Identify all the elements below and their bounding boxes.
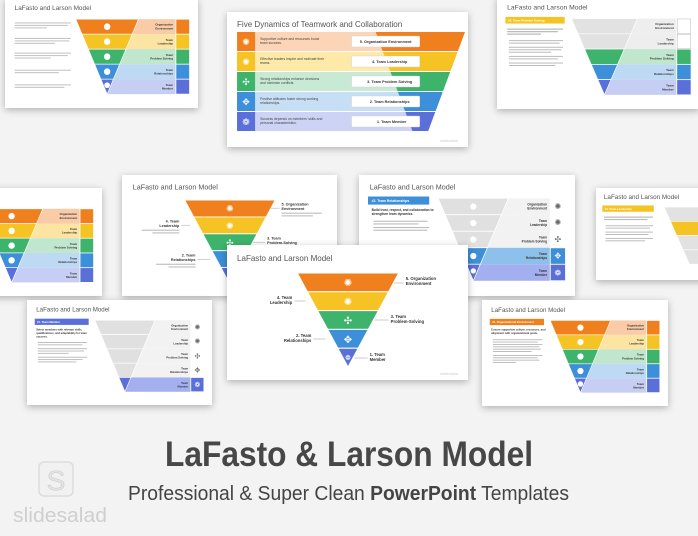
slide: bottom-right organizational environment: Team xyxy=(637,367,644,371)
slide: bottom-right organizational environment: alignment with organizational goals. xyxy=(491,331,538,335)
slide: middle-left center funnel: 3. Team xyxy=(267,237,281,241)
slide: top-center five dynamics: Strong relationships enhance decisions xyxy=(260,77,320,81)
slide: top-center five dynamics: 5. Organization Environment xyxy=(360,40,412,44)
slide: bottom-left team member: Team xyxy=(181,367,189,371)
slide: top-right side funnel: Member xyxy=(662,87,675,91)
slide: far-left partial: Organization xyxy=(60,212,77,216)
slide: middle-right team relationships xyxy=(359,175,575,296)
slide: far-left partial: Member xyxy=(66,275,78,279)
slide: top-center five dynamics xyxy=(227,12,468,147)
slide: top-center five dynamics: 2. Team Relationships xyxy=(370,100,410,104)
slide: middle-right team relationships: #2. Team Relationships xyxy=(372,199,409,203)
slide: bottom-left team member: Relationships xyxy=(170,370,189,374)
slide: bottom-left team member: ❁ xyxy=(194,381,200,389)
slide: far-left partial xyxy=(0,188,102,296)
slide: bottom-left team member: Team xyxy=(181,338,189,342)
slide: top-right side funnel: Relationships xyxy=(654,72,674,76)
slide: top-left side funnel: Environment xyxy=(155,26,173,30)
slide: top-center five dynamics: ✺ xyxy=(242,37,250,47)
slide: bottom-left team member: Select members with relevant skills, xyxy=(36,327,83,331)
slide: front center funnel: ✺ xyxy=(344,297,352,308)
slide: middle-left center funnel: 4. Team xyxy=(166,220,180,224)
slide: top-center five dynamics: ❁ xyxy=(242,117,250,127)
slide: front center funnel: 2. Team xyxy=(296,333,312,338)
slide: front center funnel: ✣ xyxy=(344,316,352,327)
slide: bottom-left team member: ✥ xyxy=(194,366,200,374)
slide: bottom-right organizational environment: Problem Solving xyxy=(622,356,644,360)
slide: middle-right team relationships: Leadership xyxy=(530,223,547,227)
slide: top-center five dynamics: relationships. xyxy=(260,101,280,105)
slide: middle-left center funnel: ✣ xyxy=(226,238,234,248)
slide: front center funnel: 1. Team xyxy=(370,352,385,357)
slide: bottom-left team member: ✣ xyxy=(194,352,200,360)
slide: top-center five dynamics: ✣ xyxy=(242,77,250,87)
slide: middle-right team relationships: Organization xyxy=(527,202,547,206)
slide: middle-right team relationships: strengthen team dynamics. xyxy=(372,212,413,216)
slide: top-left side funnel: Leadership xyxy=(158,41,173,45)
slide: top-center five dynamics: Success depends on members' skills and xyxy=(260,117,322,121)
slide: far-left partial: Team xyxy=(70,227,78,231)
slide: front center funnel: ✥ xyxy=(344,335,352,346)
slide: top-center five dynamics: Positive attitudes foster strong working xyxy=(260,97,318,101)
slide: bottom-left team member: Member xyxy=(178,384,189,389)
slide: bottom-right organizational environment: Ensure supportive culture, resources, and xyxy=(491,328,546,332)
slide: front center funnel: Environment xyxy=(406,281,432,286)
slide: top-left side funnel: Member xyxy=(162,87,174,91)
slide: top-right side funnel: Leadership xyxy=(658,41,674,45)
slide: top-center five dynamics: Supportive culture and resources boost xyxy=(260,37,319,41)
slide: middle-right team relationships: ❁ xyxy=(555,268,562,277)
slide: top-right side funnel: Organization xyxy=(655,22,674,26)
slide: bottom-right organizational environment: LaFasto and Larson Model xyxy=(491,307,565,314)
slide: front center funnel: ✺ xyxy=(344,278,352,289)
slide: top-center five dynamics: slidesalad xyxy=(440,138,458,143)
slide: bottom-left team member: Leadership xyxy=(173,341,188,345)
slide: middle-right team relationships: Team xyxy=(539,252,547,256)
slide: bottom-right organizational environment: Team xyxy=(637,382,644,386)
logo: slidesalad xyxy=(13,461,107,527)
slide: front center funnel: 5. Organization xyxy=(406,276,436,281)
slide: bottom-left team member: ✺ xyxy=(194,324,200,332)
slide: top-center five dynamics: ✥ xyxy=(242,97,250,107)
slide: top-left side funnel: Team xyxy=(166,68,173,72)
slide: bottom-left team member: success. xyxy=(36,335,48,338)
slide: bottom-right organizational environment: Team xyxy=(637,353,644,357)
slide: top-left side funnel: Organization xyxy=(155,23,173,27)
slide: far-left partial: Team xyxy=(70,242,78,246)
slide: top-right side funnel: Team xyxy=(666,84,674,88)
slide: bottom-left team member: Problem Solving xyxy=(166,356,188,360)
slide: top-left side funnel: Team xyxy=(166,38,173,42)
slide: top-center five dynamics: personal characteristics. xyxy=(260,121,297,125)
logo: slidesalad: slidesalad xyxy=(13,505,107,527)
slide: top-right side funnel: LaFasto and Larson Model xyxy=(507,4,588,11)
slide: middle-left center funnel xyxy=(122,175,337,296)
slide: middle-right team relationships: Relationships xyxy=(526,256,547,260)
slide: front center funnel: 3. Team xyxy=(391,314,406,319)
icon: S box: S xyxy=(47,465,65,496)
slide: top-center five dynamics: ✺ xyxy=(242,57,250,67)
slide: front center funnel: LaFasto and Larson Model xyxy=(237,254,333,263)
slide: bottom-right organizational environment: Relationships xyxy=(626,371,644,375)
slide: top-left side funnel: LaFasto and Larson Model xyxy=(15,5,91,12)
slide: top-left side funnel: Relationships xyxy=(154,72,173,76)
slide: top-left side funnel xyxy=(5,0,198,108)
slide: far-left partial: Relationships xyxy=(58,260,78,264)
slide: middle-right team relationships: ✺ xyxy=(555,202,562,211)
slide: middle-right team relationships: ✥ xyxy=(555,251,562,260)
slide: top-right side funnel: Environment xyxy=(655,26,674,30)
slide: top-right side funnel: #2. Team Problem Solving xyxy=(508,19,545,22)
slide: middle-left center funnel: 2. Team xyxy=(182,254,196,258)
slide: top-center five dynamics: and minimize conflicts. xyxy=(260,81,294,85)
slide: middle-left center funnel: Leadership xyxy=(159,224,180,228)
slide: bottom-left team member: #1. Team Member xyxy=(37,320,61,324)
slide: top-center five dynamics: 1. Team Member xyxy=(377,120,407,124)
slide: middle-right team relationships: Problem Solving xyxy=(522,240,547,244)
slide: bottom-left team member xyxy=(27,300,212,405)
slide: top-center five dynamics: teams. xyxy=(260,61,270,65)
slide: top-right side funnel: Team xyxy=(666,68,674,72)
slide: bottom-right organizational environment: Team xyxy=(637,338,644,342)
slide: front center funnel: Relationships xyxy=(284,338,312,343)
slide: top-right side funnel: Team xyxy=(666,38,674,42)
slide: bottom-left team member: ✺ xyxy=(194,338,200,346)
slide: far-left partial: Leadership xyxy=(62,231,77,235)
slide: bottom-right organizational environment: Leadership xyxy=(629,342,644,346)
slide: middle-left center funnel: Environment xyxy=(281,207,305,211)
slide: far-left partial: Problem Solving xyxy=(55,245,77,249)
slide: front center funnel: 4. Team xyxy=(277,295,293,300)
slide title: Five Dynamics of Teamwork and Collaboration xyxy=(237,20,402,29)
slide: top-left side funnel: Problem Solving xyxy=(150,56,173,61)
slide: middle-right team relationships: Build trust, respect, and collaboration to xyxy=(372,208,434,212)
slide: middle-right team relationships: Environment xyxy=(527,207,548,211)
slide: front center funnel: Problem-Solving xyxy=(391,319,424,324)
slide: top-left side funnel: Team xyxy=(166,83,173,87)
slide: far-left partial: Team xyxy=(70,271,78,275)
slide: bottom-right organizational environment: Environment xyxy=(627,327,644,331)
slide: front center funnel: Leadership xyxy=(270,300,293,305)
slide: bottom-left team member: Team xyxy=(181,352,189,356)
slide: bottom-right organizational environment: #5. Organizational Environment xyxy=(492,320,534,324)
slide: middle-left center funnel: ✺ xyxy=(226,204,234,214)
slide: middle-left center funnel: Problem-Solving xyxy=(267,241,298,245)
slide: middle-right team relationships: LaFasto and Larson Model xyxy=(370,183,456,191)
slide: bottom-left team member: Environment xyxy=(171,327,188,331)
slide: front center funnel: slidesalad xyxy=(440,371,458,376)
slide: middle-left center funnel: 5. Organization xyxy=(281,202,309,206)
slide: middle-right team relationships: Team xyxy=(539,236,547,240)
slide: far-right partial: LaFasto and Larson Model xyxy=(604,194,679,201)
slide: middle-left center funnel: ✺ xyxy=(226,221,234,231)
slide: top-right side funnel xyxy=(497,0,698,109)
slide: bottom-left team member: LaFasto and Larson Model xyxy=(36,307,110,314)
slide: middle-right team relationships: Team xyxy=(539,269,547,273)
slide: top-center five dynamics: 4. Team Leadership xyxy=(372,60,408,64)
slide: front center funnel: Member xyxy=(370,357,386,362)
slide: top-center five dynamics: Effective leaders inspire and motivate their xyxy=(260,57,325,61)
subtitle: Professional & Super Clean PowerPoint Templates xyxy=(128,483,569,505)
slide: top-center five dynamics: 3. Team Problem Solving xyxy=(367,80,413,84)
slide: bottom-right organizational environment: Member xyxy=(633,385,645,389)
slide: bottom-left team member: qualifications, and adaptability for team xyxy=(36,331,88,335)
slide: middle-left center funnel: LaFasto and Larson Model xyxy=(133,183,218,191)
slide: far-left partial: Environment xyxy=(60,216,77,220)
slide: far-right partial xyxy=(596,188,698,280)
slide: bottom-left team member: Organization xyxy=(171,323,188,327)
slide: front center funnel: ❁ xyxy=(345,354,351,362)
slide: far-right partial: #4. Team Leadership xyxy=(605,207,632,211)
slide: bottom-right organizational environment xyxy=(482,300,668,406)
slide: middle-right team relationships: ✣ xyxy=(555,235,562,244)
slide: bottom-left team member: Team xyxy=(181,381,189,385)
slide: middle-right team relationships: Team xyxy=(539,219,547,223)
slide: middle-left center funnel: Relationships xyxy=(171,258,195,262)
slide: top-right side funnel: Problem Solving xyxy=(650,57,674,61)
slide: middle-right team relationships: Member xyxy=(535,273,548,277)
slide: front center funnel xyxy=(227,245,468,380)
slide: middle-right team relationships: ✺ xyxy=(555,218,562,227)
slide: top-right side funnel: Team xyxy=(666,53,674,57)
slide: top-left side funnel: Team xyxy=(166,53,173,57)
slide: bottom-right organizational environment: Organization xyxy=(627,324,644,328)
slide: top-center five dynamics: team success. xyxy=(260,41,282,45)
slide: far-left partial: Team xyxy=(70,257,78,261)
